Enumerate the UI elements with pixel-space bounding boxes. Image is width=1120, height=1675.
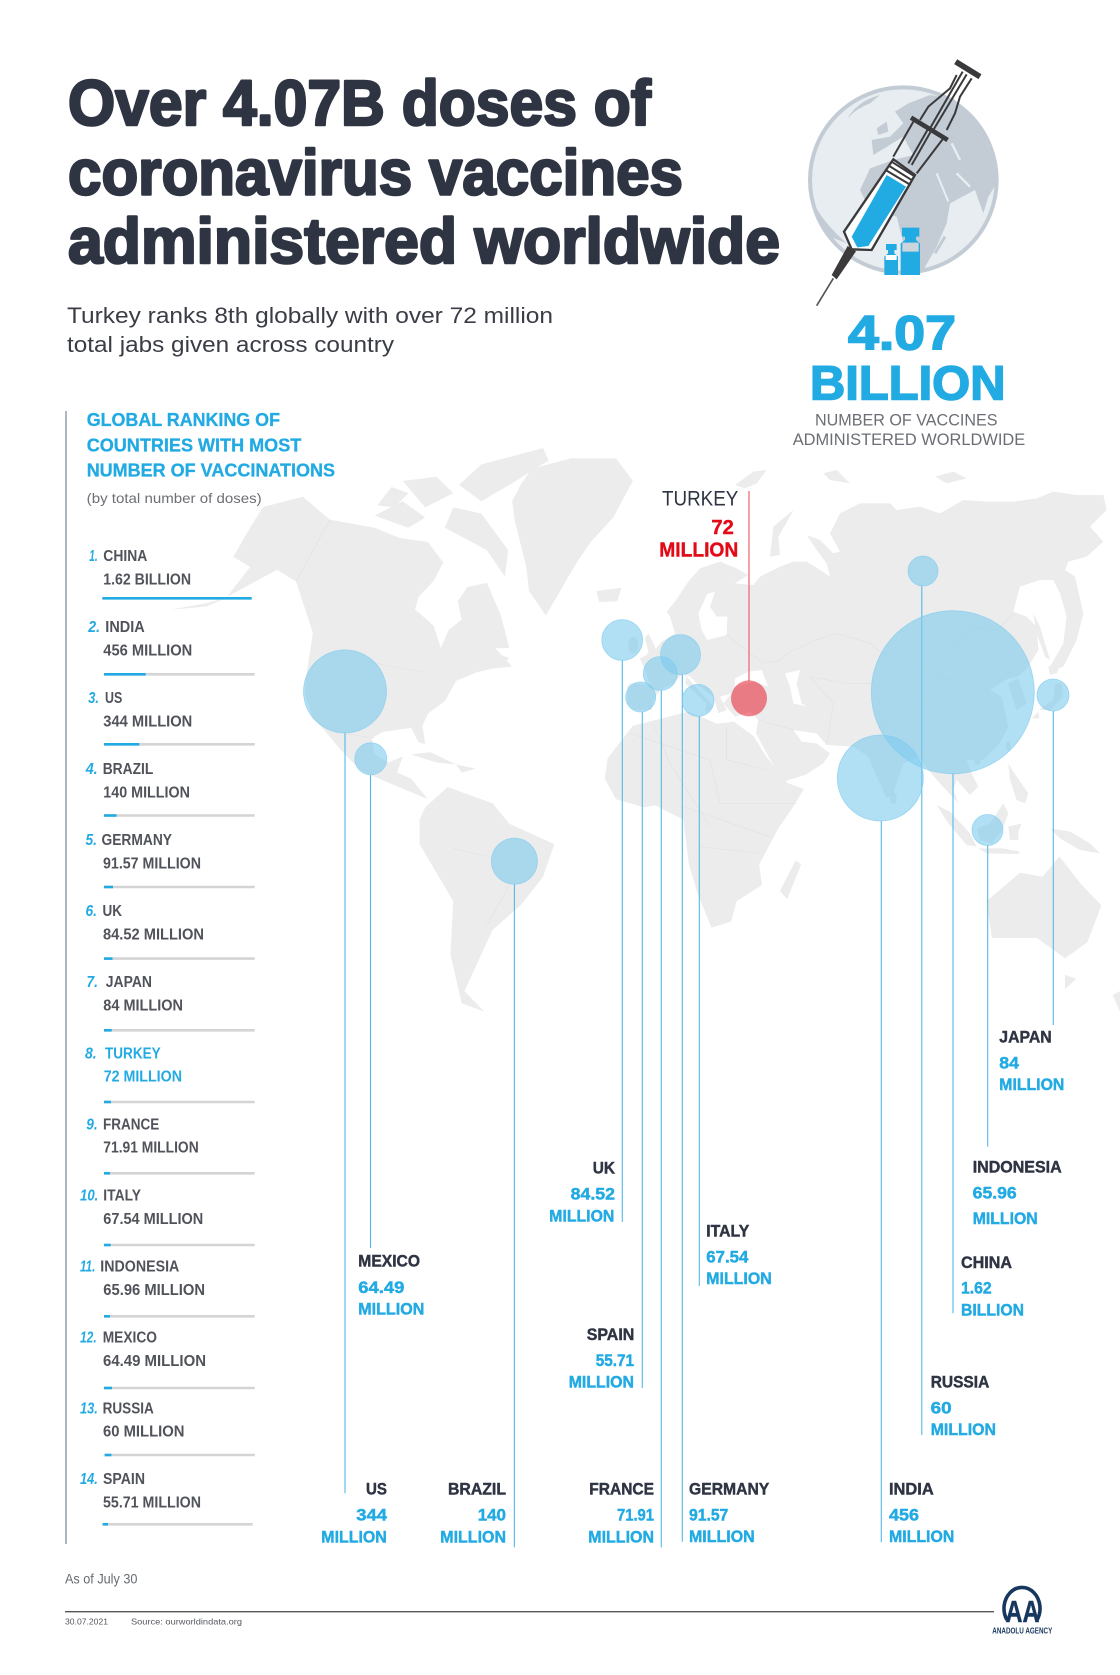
caption: number of vaccines (793, 411, 1025, 449)
rank 4 brazil (85, 761, 255, 816)
label: germany: 91.57 (689, 1506, 728, 1525)
rank 10 italy: ITALY (103, 1187, 142, 1204)
rank 13 russia: RUSSIA (103, 1400, 154, 1417)
rank 3 us (88, 690, 255, 744)
rank 7 japan: 7. (86, 974, 98, 991)
logo: anadolu agency: AA (1006, 1594, 1040, 1629)
label: russia: MILLION (931, 1420, 996, 1439)
ranking heading: NUMBER OF VACCINATIONS (87, 460, 335, 481)
logo: anadolu agency: ANADOLU AGENCY (992, 1625, 1053, 1635)
label: us: MILLION (321, 1527, 387, 1546)
label: us: US (366, 1480, 387, 1499)
rank 11 indonesia (80, 1258, 255, 1316)
rank 4 brazil: 4. (85, 761, 98, 778)
rank 3 us: 344 MILLION (103, 714, 192, 731)
data bubbles on map (304, 556, 1069, 884)
rank 12 mexico: 64.49 MILLION (103, 1353, 206, 1370)
rank 14 spain: 55.71 MILLION (103, 1495, 201, 1512)
ranking note: (by total number of doses) (87, 490, 262, 506)
rank 11 indonesia: INDONESIA (100, 1258, 179, 1275)
label: spain: MILLION (569, 1372, 634, 1391)
rank 13 russia (80, 1400, 255, 1455)
label: uk: 84.52 (571, 1185, 615, 1204)
label: russia (931, 1373, 996, 1439)
caption: number of vaccines: NUMBER OF VACCINES (815, 411, 998, 429)
rank 6 uk: 6. (86, 903, 97, 920)
rank 7 japan: 84 MILLION (103, 998, 183, 1015)
label: japan (999, 1028, 1064, 1094)
subtitle: total jabs given across country (67, 332, 395, 357)
label: china: 1.62 (961, 1279, 992, 1298)
label: brazil: MILLION (440, 1527, 506, 1546)
rank 1 china: CHINA (103, 548, 147, 565)
footer (65, 1612, 994, 1626)
rank 14 spain (80, 1471, 253, 1524)
label: france: MILLION (588, 1527, 654, 1546)
rank 10 italy: 10. (80, 1187, 98, 1204)
rank 14 spain: 14. (80, 1471, 98, 1488)
rank 2 india (87, 619, 255, 674)
big number: 4.07 billion: 4.07 (848, 306, 956, 360)
rank 5 germany (86, 832, 255, 887)
rank 7 japan (86, 974, 255, 1030)
label: france: 71.91 (617, 1506, 654, 1525)
label: italy: ITALY (706, 1222, 750, 1241)
rank 1 china: 1.62 BILLION (103, 571, 191, 588)
rank 11 indonesia: 65.96 MILLION (103, 1282, 205, 1299)
label: germany (689, 1480, 770, 1546)
label: us: 344 (356, 1506, 388, 1525)
rank 8 turkey (85, 1045, 255, 1102)
footer: Source: ourworldindata.org (131, 1616, 242, 1626)
ranking panel (66, 409, 335, 1544)
rank 8 turkey: TURKEY (105, 1045, 161, 1062)
label: india (889, 1480, 954, 1546)
rank 12 mexico (80, 1330, 255, 1388)
rank 1 china: 1. (89, 548, 98, 565)
label: india: MILLION (889, 1527, 954, 1546)
label: uk (549, 1159, 616, 1226)
label: italy: 67.54 (706, 1247, 749, 1266)
ranking heading: COUNTRIES WITH MOST (87, 435, 301, 456)
label: italy: MILLION (706, 1269, 772, 1288)
subtitle (67, 303, 553, 357)
rank 5 germany: GERMANY (102, 832, 173, 849)
rank 6 uk: 84.52 MILLION (103, 927, 204, 944)
rank 4 brazil: BRAZIL (103, 761, 153, 778)
label: italy (706, 1222, 772, 1288)
label: france (588, 1480, 654, 1546)
rank 6 uk (86, 903, 255, 959)
label: indonesia: MILLION (973, 1209, 1038, 1228)
world map (170, 448, 1120, 1011)
title: coronavirus vaccines (68, 137, 683, 209)
rank 7 japan: JAPAN (106, 974, 152, 991)
label: turkey: 72 (711, 516, 734, 539)
rank 14 spain: SPAIN (103, 1471, 145, 1488)
rank 5 germany: 5. (86, 832, 97, 849)
subtitle: Turkey ranks 8th globally with over 72 million (67, 303, 553, 328)
label: germany: GERMANY (689, 1480, 770, 1499)
label: china: CHINA (961, 1253, 1012, 1272)
footer: 30.07.2021 (65, 1616, 108, 1626)
label: turkey: MILLION (659, 538, 738, 561)
rank 3 us: US (105, 690, 122, 707)
ranking heading: GLOBAL RANKING OF (87, 409, 280, 430)
label: uk: MILLION (549, 1207, 614, 1226)
big number: 4.07 billion (810, 306, 1006, 410)
label: japan: MILLION (999, 1075, 1064, 1094)
label: indonesia: 65.96 (973, 1184, 1017, 1203)
caption: number of vaccines: ADMINISTERED WORLDWIDE (793, 431, 1025, 449)
leader lines (345, 491, 1053, 1547)
vials (884, 228, 920, 275)
rank 8 turkey: 72 MILLION (104, 1069, 182, 1086)
label: indonesia: INDONESIA (973, 1157, 1062, 1176)
label: indonesia (973, 1157, 1062, 1228)
label: china (961, 1253, 1024, 1320)
rank 2 india: 2. (87, 619, 100, 636)
label: france: FRANCE (589, 1480, 654, 1499)
title (68, 67, 780, 277)
rank 2 india: INDIA (105, 619, 145, 636)
title: Over 4.07B doses of (68, 67, 652, 139)
label: mexico: MEXICO (358, 1252, 420, 1271)
label: spain: SPAIN (587, 1325, 634, 1344)
label: russia: RUSSIA (931, 1373, 989, 1392)
rank 11 indonesia: 11. (80, 1258, 95, 1275)
label: brazil (440, 1480, 506, 1546)
as-of note: As of July 30 (65, 1571, 137, 1586)
rank 2 india: 456 MILLION (103, 643, 192, 660)
label: brazil: BRAZIL (448, 1480, 506, 1499)
label: spain: 55.71 (596, 1351, 634, 1370)
label: turkey: TURKEY (662, 487, 738, 510)
rank 9 france (86, 1116, 255, 1173)
label: japan: JAPAN (999, 1028, 1052, 1047)
rank 9 france: FRANCE (103, 1116, 159, 1133)
label: japan: 84 (999, 1054, 1020, 1073)
ranking heading (87, 409, 335, 481)
rank 10 italy (80, 1187, 255, 1245)
label: mexico: 64.49 (358, 1278, 404, 1297)
label: uk: UK (593, 1159, 616, 1178)
rank 3 us: 3. (88, 690, 99, 707)
icon: globe with syringe and vials (810, 62, 997, 306)
label: spain (569, 1325, 634, 1391)
label: mexico: MILLION (358, 1300, 424, 1319)
rank 4 brazil: 140 MILLION (103, 784, 190, 801)
label: brazil: 140 (478, 1506, 506, 1525)
rank 13 russia: 60 MILLION (103, 1424, 184, 1441)
label: india: INDIA (889, 1480, 934, 1499)
rank 10 italy: 67.54 MILLION (103, 1211, 203, 1228)
label: india: 456 (889, 1506, 919, 1525)
label: mexico (358, 1252, 424, 1319)
rank 9 france: 9. (86, 1116, 98, 1133)
rank 9 france: 71.91 MILLION (103, 1140, 199, 1157)
rank 8 turkey: 8. (85, 1045, 97, 1062)
rank 5 germany: 91.57 MILLION (103, 856, 201, 872)
label: russia: 60 (931, 1398, 952, 1417)
logo: anadolu agency (992, 1587, 1053, 1635)
big number: 4.07 billion: BILLION (810, 356, 1006, 410)
title: administered worldwide (68, 205, 780, 277)
rank 6 uk: UK (102, 903, 123, 920)
label: germany: MILLION (689, 1527, 755, 1546)
label: china: BILLION (961, 1301, 1024, 1320)
rank 12 mexico: MEXICO (103, 1330, 157, 1347)
rank 1 china (89, 548, 252, 598)
rank 13 russia: 13. (80, 1400, 98, 1417)
syringe (817, 62, 980, 306)
rank 12 mexico: 12. (80, 1330, 97, 1347)
label: turkey (659, 487, 738, 561)
label: us (321, 1480, 388, 1546)
